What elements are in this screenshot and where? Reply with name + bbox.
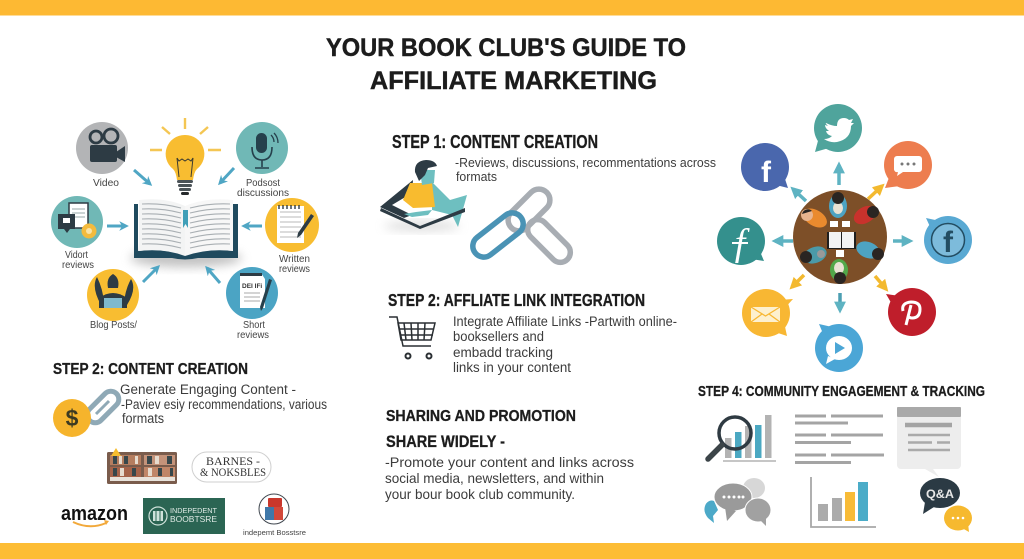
icon: blue f bubble: f: [943, 226, 954, 259]
logo: independent bookstore: INDEPEDENT: [170, 506, 217, 515]
label: podcast discussions: [237, 177, 289, 199]
icon: pound f bubble: [717, 217, 765, 265]
label: short reviews: Short: [243, 319, 265, 331]
logo: independent bookstore: [143, 498, 225, 534]
text: generate engaging content: formats: [122, 411, 164, 426]
icon: text lines block: [795, 416, 884, 462]
label: written reviews: Written: [279, 253, 310, 265]
text: step 2 affiliate description: [453, 314, 677, 375]
icon: Q and A bubbles: Q&A: [926, 489, 954, 501]
icon: orange chat bubble: [884, 141, 932, 189]
heading: share widely: SHARE WIDELY -: [386, 433, 505, 451]
heading: step 1 content creation: STEP 1: CONTENT CREATION: [392, 132, 598, 152]
icon: blog posts: [87, 269, 139, 321]
logo: round bookstore badge: [259, 494, 289, 524]
logo: bookstore shelf: [107, 448, 177, 484]
text: generate engaging content: Generate Engaging Content -: [120, 382, 296, 397]
label: blog posts: Blog Posts/: [90, 319, 137, 331]
logo: independent bookstore: BOOBTSRE: [170, 514, 217, 524]
icon: play bubble: [815, 324, 863, 372]
icon: magnifier over bar chart: [708, 415, 776, 461]
icon: bar chart: [811, 477, 876, 527]
label: video reviews: Vidort: [65, 249, 88, 261]
icon: twitter bubble: [814, 104, 862, 152]
logo: amazon: amazon: [61, 503, 128, 525]
panel: content hub diagram: [51, 118, 319, 341]
icon: pinterest bubble: [886, 288, 936, 336]
heading: sharing and promotion: SHARING AND PROMOTION: [386, 408, 576, 425]
icon: mail bubble: [742, 289, 793, 337]
text: step 1 description: formats: [456, 169, 497, 184]
title: [326, 34, 686, 95]
logo: barnes and noksbles: & NOKSBLES: [200, 465, 266, 479]
text: sharing description: -Promote your content and links across: [385, 454, 634, 470]
title: YOUR BOOK CLUB'S GUIDE TO: [326, 34, 686, 62]
label: short reviews: reviews: [237, 329, 269, 341]
icon: chain links: [468, 185, 574, 266]
text: sharing description: social media, newsletters, and within: [385, 470, 604, 486]
icon: facebook bubble: f: [761, 156, 772, 189]
text: sharing description: [385, 454, 634, 502]
icon: survey card: [897, 407, 961, 477]
heading: step 2 affiliate link integration: STEP 2: AFFLIATE LINK INTEGRATION: [388, 290, 645, 310]
icon: chat bubbles: [704, 478, 771, 526]
text: step 1 description: [455, 155, 716, 184]
label: video: Video: [93, 177, 119, 189]
label: video reviews: reviews: [62, 259, 94, 271]
icon: open book: [130, 199, 242, 267]
icon: dollar coin with chain: [53, 388, 122, 437]
label: short reviews: [237, 319, 269, 341]
label: podcast discussions: Podsost: [246, 177, 280, 189]
text: step 2 affiliate description: embadd tracking: [453, 345, 553, 360]
heading: step 2 content creation: STEP 2: CONTENT CREATION: [53, 361, 248, 378]
panel: social network diagram: [717, 104, 972, 372]
text: generate engaging content: [120, 382, 327, 426]
text: generate engaging content: -Paviev esiy recommendations, various: [121, 397, 327, 412]
label: written reviews: reviews: [279, 263, 310, 275]
icon: person reading: [380, 160, 467, 231]
text: step 1 description: -Reviews, discussions, recommentations across: [455, 155, 716, 170]
icon: Q and A bubbles: [920, 478, 972, 532]
text: step 2 affiliate description: booksellers and: [453, 329, 544, 344]
icon: facebook bubble: [741, 143, 789, 191]
icon: podcast microphone: [236, 122, 288, 174]
icon: blue f bubble: [924, 216, 972, 264]
icon: short reviews: DEI IFi: [242, 283, 262, 290]
icon: video camera: [76, 122, 128, 174]
bottom yellow band: [0, 543, 1024, 559]
icon: video reviews: [51, 196, 103, 248]
label: video reviews: [62, 249, 94, 271]
text: step 2 affiliate description: Integrate Affiliate Links -Partwith online-: [453, 314, 677, 329]
icon: dollar coin with chain: $: [66, 405, 79, 431]
text: step 2 affiliate description: links in your content: [453, 360, 571, 375]
icon: round table with members: [793, 190, 887, 284]
label: podcast discussions: discussions: [237, 187, 289, 199]
logo: barnes and noksbles: [192, 452, 271, 482]
icon: written reviews notepad: [265, 198, 319, 252]
arrows into book: [107, 168, 262, 283]
icon: light bulb: [150, 118, 221, 195]
arrows out of circle: [775, 165, 910, 310]
top yellow band: [0, 0, 1024, 16]
icon: short reviews: [226, 267, 278, 319]
icon: shopping cart: [389, 317, 435, 358]
logo: barnes and noksbles: BARNES -: [206, 454, 260, 468]
icon: pound f bubble: f: [735, 222, 750, 264]
label: written reviews: [279, 253, 310, 275]
title: AFFILIATE MARKETING: [370, 67, 657, 95]
label: independent bookstore: indepemt Bosstsre: [243, 528, 306, 537]
text: sharing description: your bour book club community.: [385, 486, 575, 502]
